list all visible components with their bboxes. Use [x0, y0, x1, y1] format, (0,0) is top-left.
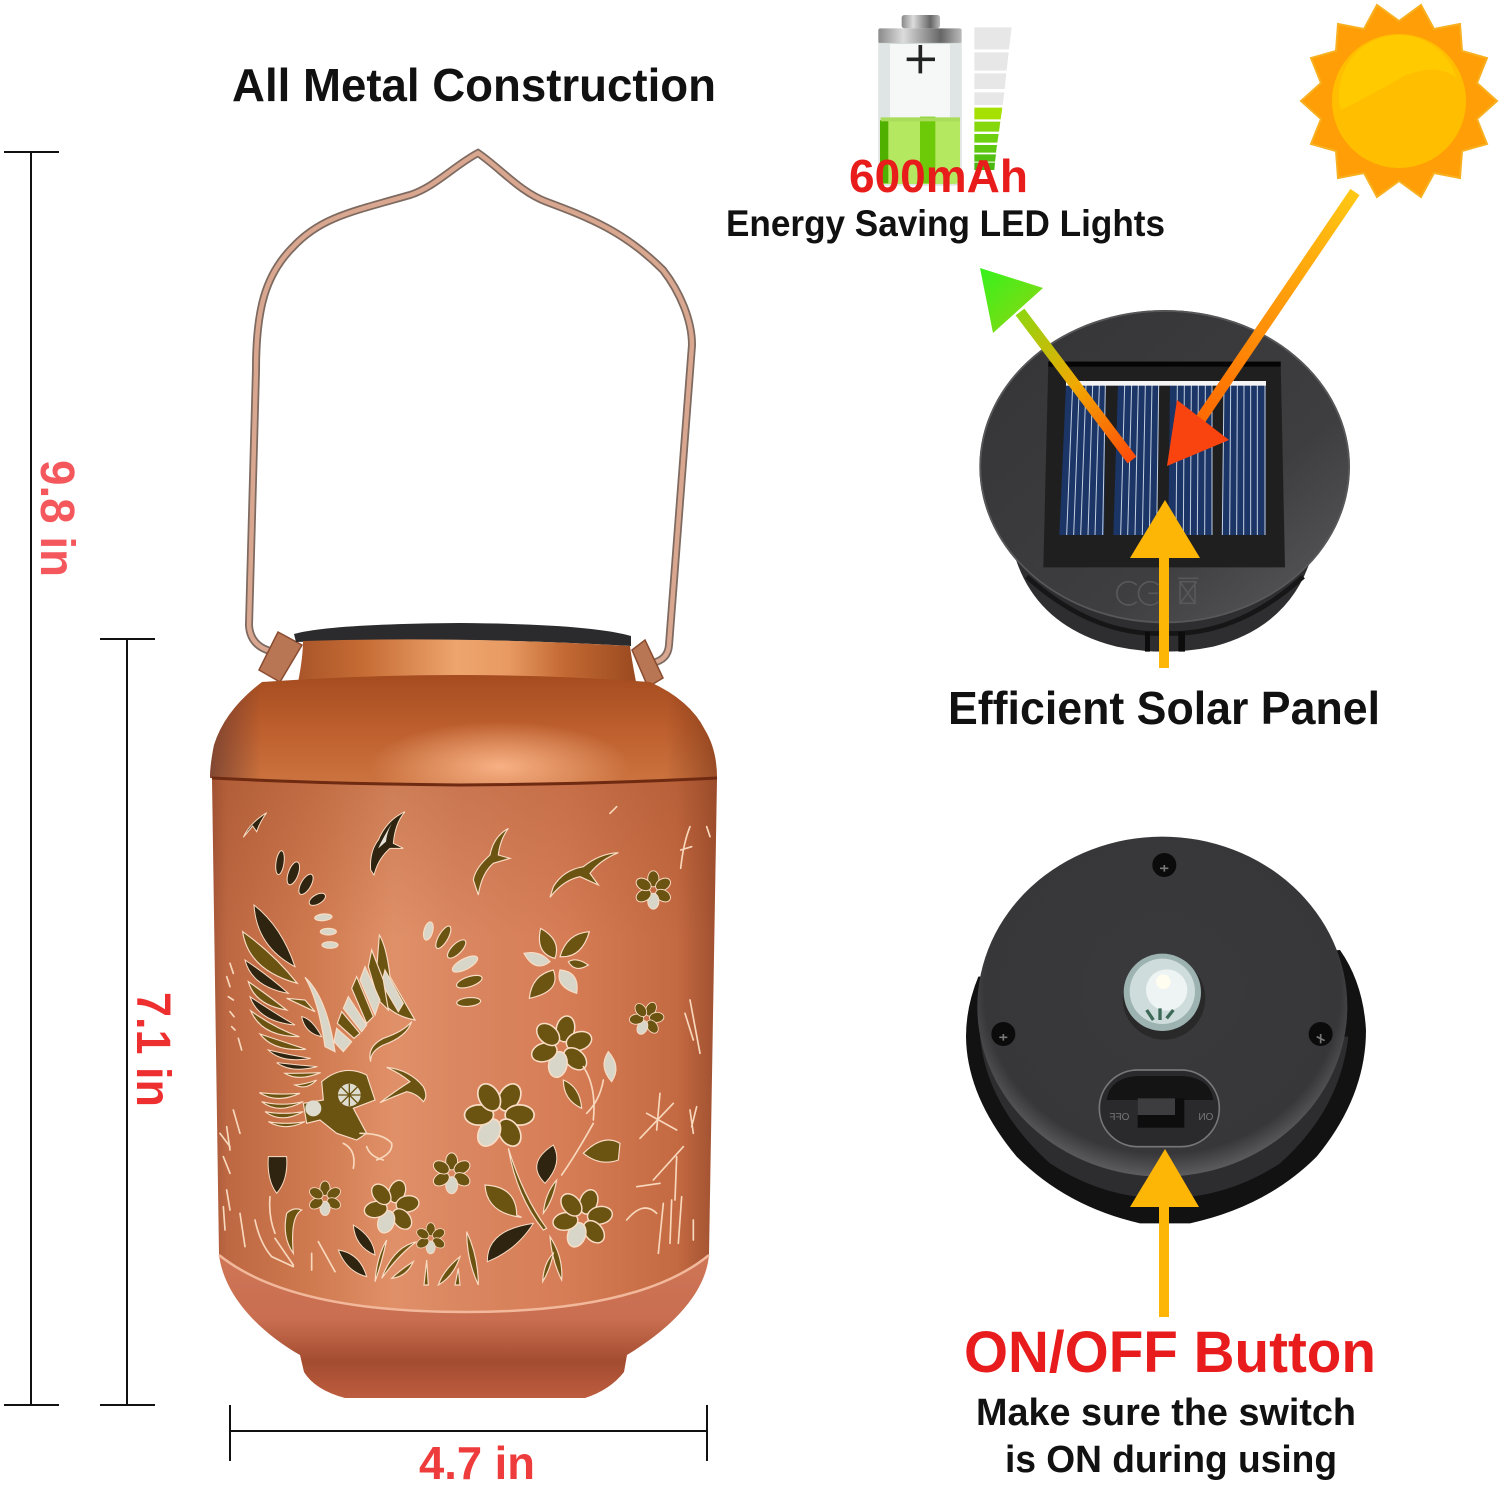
- solar cell frame: [1043, 362, 1285, 567]
- battery cylinder: [878, 15, 962, 185]
- arrow: sunlight in: [1167, 192, 1355, 466]
- module top disc: [979, 310, 1350, 623]
- switch note: is ON during using: [1005, 1439, 1337, 1481]
- switch note: [976, 1392, 1356, 1481]
- battery level bars: [974, 27, 1012, 170]
- arrow: solar panel pointer: [1130, 500, 1200, 668]
- dimension: overall height 9.8 in: 9.8 in: [30, 460, 83, 577]
- lantern: [210, 153, 717, 1398]
- lantern cut-out pattern: [220, 807, 710, 1285]
- birds: [243, 812, 692, 897]
- eagle: [243, 905, 426, 1168]
- handle clips: [259, 632, 663, 687]
- solar panel label: Efficient Solar Panel: [948, 682, 1380, 734]
- on/off switch: [1099, 1070, 1219, 1147]
- LED bulb: [1123, 954, 1205, 1040]
- lantern shoulder: [210, 675, 717, 784]
- solar cells: [1059, 381, 1266, 535]
- battery capacity label: 600mAh: [849, 150, 1028, 202]
- on/off switch: OFF: [1109, 1112, 1129, 1123]
- dimension: width 4.7 in: [230, 1405, 707, 1485]
- module lower body: [1015, 557, 1312, 652]
- arrow: power to LED: [980, 268, 1132, 460]
- on/off switch: ON: [1198, 1112, 1213, 1123]
- dimension: body height 7.1 in: [100, 639, 179, 1405]
- title: all metal construction: All Metal Construction: [232, 59, 716, 111]
- dimension: overall height 9.8 in: [4, 152, 83, 1405]
- led lights label: Energy Saving LED Lights: [726, 203, 1165, 244]
- lantern handle: [249, 153, 692, 687]
- on/off heading: ON/OFF Button: [964, 1320, 1376, 1385]
- outer black ring: [966, 950, 1366, 1223]
- icon: battery: [878, 15, 1012, 185]
- plate: [977, 837, 1347, 1177]
- lantern body: [212, 778, 717, 1312]
- certification marks: [1117, 578, 1198, 605]
- wing arcs: [274, 850, 484, 1007]
- side pattern marks: [220, 807, 710, 1253]
- lantern lower band and foot: [219, 1255, 709, 1398]
- solar panel module: [979, 310, 1350, 652]
- lantern solar lid: [294, 623, 631, 646]
- flowers: [255, 871, 673, 1285]
- dimension: body height 7.1 in: 7.1 in: [126, 992, 179, 1107]
- rim step: [980, 1037, 1348, 1198]
- screws: [991, 853, 1333, 1046]
- lantern neck: [296, 639, 638, 692]
- icon: sun: [1301, 5, 1497, 197]
- switch module underside: [966, 837, 1366, 1223]
- switch note: Make sure the switch: [976, 1392, 1356, 1434]
- arrow: switch pointer: [1130, 1149, 1199, 1317]
